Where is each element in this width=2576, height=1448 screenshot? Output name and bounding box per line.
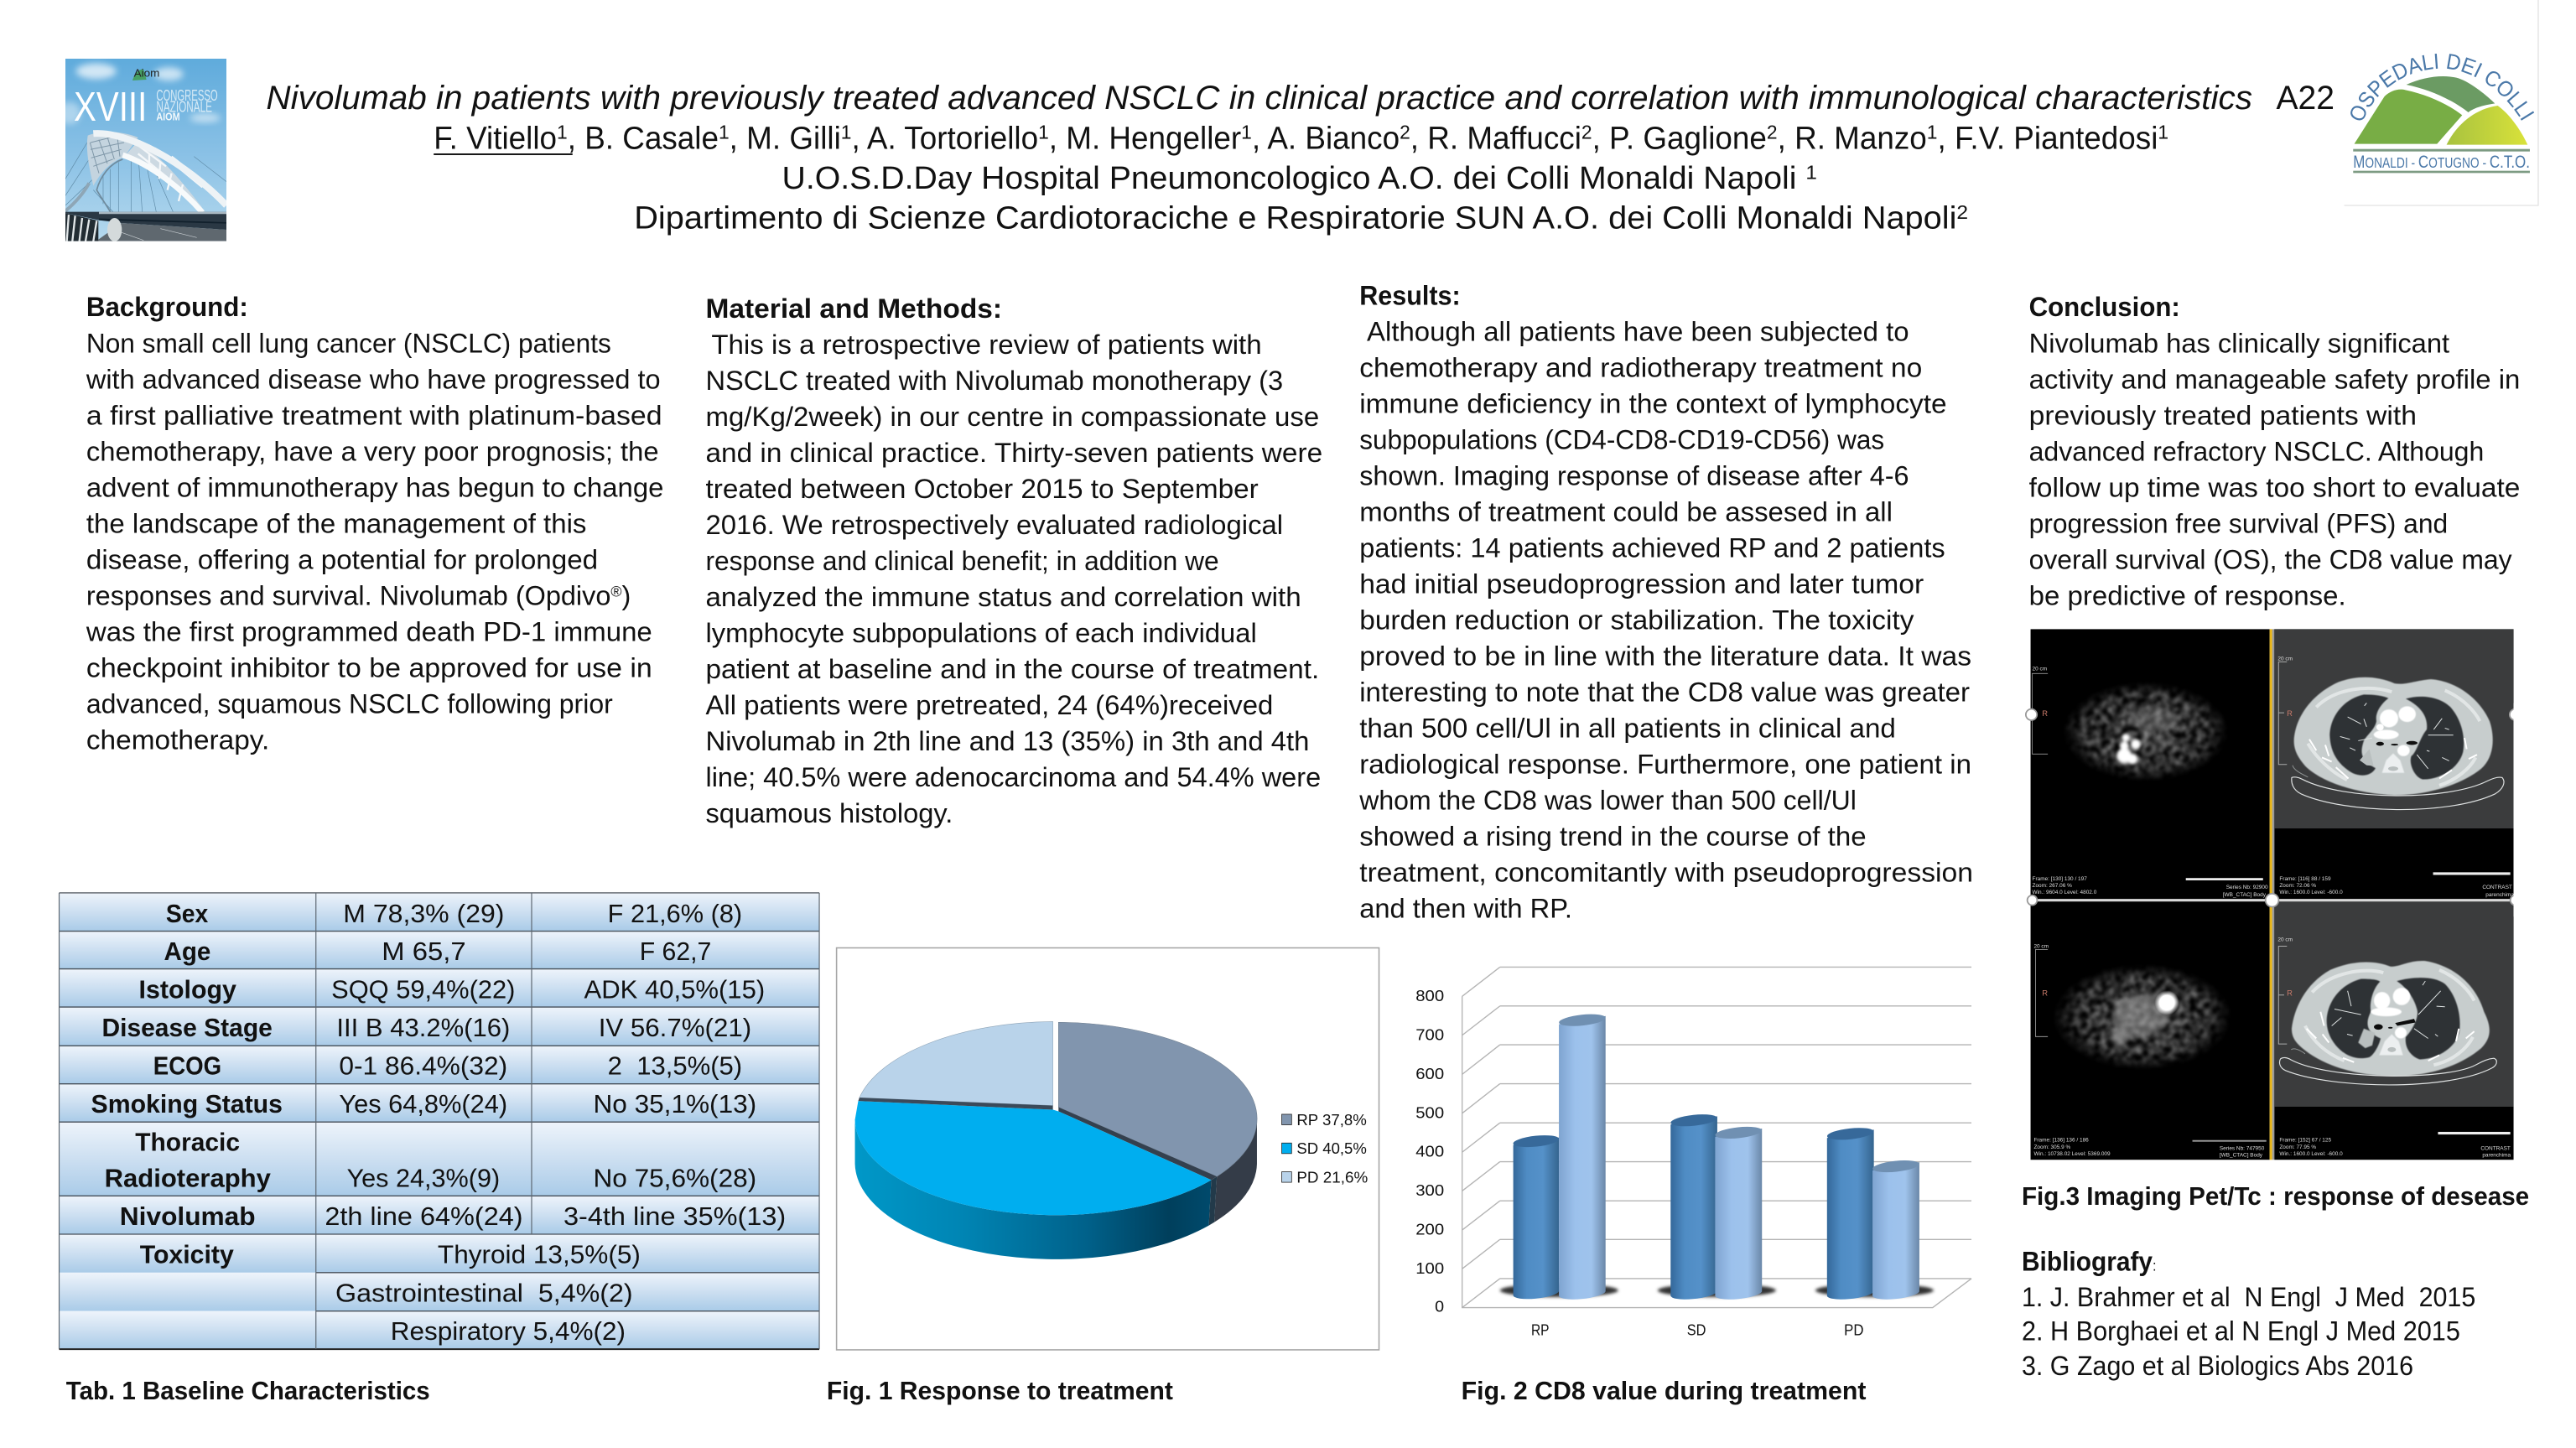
- cover title: AIOM: [156, 111, 180, 122]
- PET scan: after: [2033, 943, 2267, 1158]
- icon: congress cover with bridge: [59, 59, 226, 241]
- icon: hospital logo: OSPEDALI DEI COLLI: [2350, 54, 2534, 121]
- row labels: Thoracic: [135, 1127, 240, 1156]
- row labels: Smoking Status: [91, 1089, 283, 1118]
- y axis labels: 500: [1415, 1103, 1444, 1121]
- panel: conclusion: be predictive of response.: [2029, 580, 2346, 610]
- pie slice: SD 40,5%: [855, 1101, 1212, 1215]
- table: baseline characteristics: [60, 893, 819, 1349]
- panel: results: showed a rising trend in the course of the: [1359, 822, 1867, 852]
- row labels: Istology: [139, 974, 237, 1004]
- caption: table 1: Tab. 1 Baseline Characteristics: [66, 1376, 430, 1405]
- row labels: Disease Stage: [101, 1013, 273, 1042]
- authors: 2: [1581, 122, 1592, 143]
- column values: 2th line 64%(24): [325, 1201, 523, 1231]
- row labels: [91, 899, 283, 1269]
- authors: , R. Manzo: [1778, 121, 1927, 156]
- column values: III B 43.2%(16): [336, 1013, 510, 1042]
- panel: background: with advanced disease who have progressed to: [86, 364, 661, 394]
- pie slice: PD 21,6%: [860, 1021, 1053, 1106]
- y axis labels: 600: [1415, 1065, 1444, 1082]
- column values: 2 13,5%(5): [608, 1051, 742, 1080]
- heading: results: Results:: [1359, 280, 1461, 310]
- PET scan: before: [2033, 666, 2268, 898]
- panel: bibliography: [2022, 1246, 2475, 1381]
- CT scan: before: Frame: [116] 88 / 159: [2279, 876, 2331, 882]
- panel: conclusion: Nivolumab has clinically significant: [2029, 328, 2449, 358]
- authors: 1: [1038, 122, 1049, 143]
- panel: background: disease, offering a potential for prolonged: [86, 544, 598, 574]
- heading: material and methods: Material and Methods:: [705, 293, 1002, 324]
- column values: 3-4th line 35%(13): [564, 1201, 786, 1231]
- column values: Thyroid 13,5%(5): [438, 1240, 641, 1269]
- panel: material and methods: treated between October 2015 to September: [705, 474, 1259, 504]
- panel: bibliography: 1. J. Brahmer et al N Engl J Med 2015: [2022, 1282, 2475, 1312]
- panel: results: burden reduction or stabilization. The toxicity: [1359, 605, 1914, 636]
- PET scan: before: Zoom: 267.06 %: [2033, 883, 2072, 889]
- chart: CD8 3D bars: [1415, 967, 1971, 1338]
- panel: material and methods: and in clinical practice. Thirty-seven patients were: [705, 438, 1322, 468]
- y axis labels: 800: [1415, 987, 1444, 1004]
- PET scan: before: Frame: [130] 130 / 197: [2033, 876, 2087, 882]
- CT scan: after: [2274, 901, 2514, 1158]
- caption: figure 1: Fig. 1 Response to treatment: [827, 1376, 1173, 1405]
- panel: conclusion: follow up time was too short to evaluate: [2029, 472, 2520, 502]
- authors: [434, 121, 2168, 156]
- CT scan: after: Zoom: 77.95 %: [2279, 1144, 2316, 1150]
- column values: No 35,1%(13): [593, 1089, 756, 1118]
- grid lines and walls: [1462, 967, 1971, 1308]
- x axis labels: PD: [1844, 1321, 1863, 1338]
- panel: material and methods: patient at baseline and in the course of treatment.: [705, 654, 1319, 684]
- CT scan: after: CONTRAST: [2480, 1145, 2511, 1151]
- y axis labels: 700: [1415, 1025, 1444, 1043]
- x axis labels: [1531, 1321, 1863, 1338]
- cover title: NAZIONALE: [156, 98, 212, 115]
- column values: ADK 40,5%(15): [584, 974, 765, 1004]
- panel: conclusion: [2029, 292, 2520, 610]
- heading: conclusion: Conclusion:: [2029, 292, 2180, 322]
- CT scan: before: R: [2287, 708, 2293, 718]
- legend: SD 40,5%: [1296, 1139, 1367, 1157]
- column values: IV 56.7%(21): [599, 1013, 751, 1042]
- caption: figure 2: Fig. 2 CD8 value during treatment: [1462, 1376, 1866, 1405]
- cover title: CONGRESSO: [156, 87, 218, 104]
- row labels: Nivolumab: [120, 1201, 256, 1231]
- PET scan: before: [WB_CTAC] Body: [2223, 892, 2267, 898]
- PET scan: after: Win.: 10738.02 Level: 5369.009: [2033, 1151, 2111, 1157]
- CT scan: after: parenchima: [2482, 1152, 2511, 1158]
- panel: conclusion: overall survival (OS), the CD8 value may: [2029, 544, 2512, 574]
- PET scan: after: [WB_CTAC] Body: [2220, 1152, 2263, 1158]
- logo mark: Aiom: [134, 68, 159, 80]
- CT scan: before: [2274, 629, 2514, 898]
- panel: results: immune deficiency in the context of lymphocyte: [1359, 389, 1947, 419]
- panel: background: ): [622, 580, 631, 610]
- panel: material and methods: [705, 293, 1322, 828]
- panel: background: [86, 292, 664, 755]
- panel: material and methods: This is a retrospective review of patients with: [711, 330, 1262, 360]
- panel: results: whom the CD8 was lower than 500 cell/Ul: [1358, 786, 1857, 816]
- cover number: XVIII: [74, 85, 147, 130]
- column values: [325, 899, 786, 1346]
- x axis labels: SD: [1687, 1321, 1706, 1338]
- column values: F 21,6% (8): [608, 899, 742, 928]
- caption: figure 3: Fig.3 Imaging Pet/Tc : response of desease: [2022, 1181, 2529, 1211]
- panel: conclusion: previously treated patients with: [2029, 400, 2417, 430]
- PET scan: after: Series Nb: 747950: [2220, 1145, 2265, 1151]
- bars: PD: [1826, 1126, 1919, 1300]
- figure: PET/CT imaging: [2026, 629, 2523, 1160]
- column values: M 78,3% (29): [343, 899, 504, 928]
- PET scan: before: 20 cm: [2033, 666, 2047, 672]
- column values: No 75,6%(28): [593, 1164, 756, 1193]
- panel: results: [1358, 280, 1973, 924]
- row labels: Age: [164, 937, 210, 966]
- panel: material and methods: squamous histology.: [705, 798, 953, 828]
- panel: background: responses and survival. Nivolumab (Opdivo: [86, 580, 605, 610]
- authors: , F.V. Piantedosi: [1937, 121, 2158, 156]
- panel: results: and then with RP.: [1359, 894, 1572, 924]
- CT scan: before: Zoom: 72.06 %: [2279, 883, 2316, 889]
- authors: , P. Gaglione: [1592, 121, 1767, 156]
- y axis labels: [1415, 987, 1444, 1315]
- CT scan: after: 20 cm: [2277, 937, 2293, 943]
- heading: background: Background:: [86, 292, 248, 322]
- column values: Yes 64,8%(24): [339, 1089, 507, 1118]
- authors: , M. Hengeller: [1049, 121, 1242, 156]
- column values: SQQ 59,4%(22): [331, 974, 515, 1004]
- panel: material and methods: mg/Kg/2week) in our centre in compassionate use: [705, 402, 1319, 432]
- affiliation 2: Dipartimento di Scienze Cardiotoraciche e Respiratorie SUN A.O. dei Colli Monaldi Napoli: [634, 201, 1898, 236]
- panel: material and methods: analyzed the immune status and correlation with: [705, 582, 1301, 612]
- y axis labels: 0: [1435, 1297, 1444, 1315]
- panel: background: ®: [610, 584, 622, 600]
- CT scan: after: R: [2287, 988, 2293, 997]
- column values: Yes 24,3%(9): [347, 1164, 500, 1193]
- PET scan: before: Win.: 9604.0 Level: 4802.0: [2033, 890, 2097, 895]
- authors: 2: [1767, 122, 1778, 143]
- pie slice side: SD: [855, 1120, 1212, 1259]
- panel: background: checkpoint inhibitor to be approved for use in: [86, 652, 652, 682]
- authors: 1: [1241, 122, 1252, 143]
- authors: 1: [719, 122, 730, 143]
- panel: results: than 500 cell/Ul in all patients in clinical and: [1359, 714, 1896, 744]
- column values: 0-1 86.4%(32): [339, 1051, 507, 1080]
- authors: , A. Tortoriello: [851, 121, 1038, 156]
- panel: results: had initial pseudoprogression and later tumor: [1359, 569, 1924, 599]
- PET scan: before: Series Nb: 92900: [2226, 885, 2268, 890]
- panel: results: proved to be in line with the literature data. It was: [1359, 641, 1971, 672]
- affiliation 2: 2: [1956, 201, 1968, 223]
- chart: response pie: [837, 947, 1379, 1350]
- column values: Gastrointestinal 5,4%(2): [335, 1279, 633, 1308]
- panel: results: treatment, concomitantly with pseudoprogression: [1359, 858, 1973, 888]
- PET scan: after: Zoom: 305.9 %: [2033, 1144, 2070, 1150]
- legend: [1282, 1111, 1368, 1186]
- row labels: Toxicity: [140, 1240, 235, 1269]
- CT scan: before: CONTRAST: [2482, 885, 2512, 890]
- panel: background: advanced, squamous NSCLC following prior: [86, 688, 613, 719]
- authors: 1: [2158, 122, 2168, 143]
- column values: Respiratory 5,4%(2): [391, 1316, 626, 1346]
- panel: background: was the first programmed death PD-1 immune: [86, 616, 652, 646]
- panel: conclusion: advanced refractory NSCLC. Although: [2029, 436, 2484, 466]
- panel: background: a first palliative treatment with platinum-based: [86, 400, 662, 430]
- authors: , B. Casale: [568, 121, 719, 156]
- PET scan: after: 20 cm: [2033, 943, 2049, 949]
- row labels: Sex: [166, 899, 208, 928]
- pie slice side: RP: [1214, 1118, 1257, 1222]
- column values: F 62,7: [640, 937, 711, 966]
- floor shadows: [1500, 1284, 1934, 1297]
- authors: , M. Gilli: [730, 121, 841, 156]
- panel: results: months of treatment could be assesed in all: [1359, 497, 1893, 527]
- panel: background: chemotherapy, have a very poor prognosis; the: [86, 436, 659, 466]
- panel: material and methods: Nivolumab in 2th line and 13 (35%) in 3th and 4th: [705, 726, 1309, 756]
- PET scan: before: R: [2042, 708, 2048, 718]
- panel: results: chemotherapy and radiotherapy treatment no: [1359, 353, 1922, 383]
- authors: 1: [557, 122, 568, 143]
- panel: background: Non small cell lung cancer (NSCLC) patients: [86, 328, 611, 358]
- CT scan: before: 20 cm: [2277, 657, 2293, 662]
- panel: background: advent of immunotherapy has begun to change: [86, 472, 664, 502]
- y axis labels: 300: [1415, 1181, 1444, 1199]
- authors: 1: [841, 122, 851, 143]
- abstract code: A22: [2276, 79, 2334, 117]
- panel: material and methods: NSCLC treated with Nivolumab monotherapy (3: [705, 366, 1283, 396]
- bars: SD: [1670, 1113, 1763, 1300]
- title: Nivolumab in patients with previously treated advanced NSCLC in clinical practice and correlation with immunological characteristics: [266, 79, 2252, 117]
- icon: hospital logo: MONALDI - COTUGNO - C.T.O.: [2353, 152, 2530, 172]
- CT scan: after: Frame: [152] 67 / 125: [2279, 1138, 2331, 1144]
- y axis labels: 200: [1415, 1221, 1444, 1238]
- viewer separators and handles: [2026, 709, 2521, 907]
- CT scan: before: Win.: 1600.0 Level: -600.0: [2279, 890, 2343, 895]
- heading: bibliography: Bibliografy:: [2022, 1246, 2157, 1276]
- CT scan: after: Win.: 1600.0 Level: -600.0: [2279, 1151, 2343, 1157]
- panel: conclusion: activity and manageable safety profile in: [2029, 364, 2520, 394]
- pie slice: RP 37,8%: [1058, 1022, 1257, 1176]
- panel: results: radiological response. Furthermore, one patient in: [1359, 750, 1971, 780]
- bars: RP: [1513, 1012, 1606, 1300]
- authors: , R. Maffucci: [1410, 121, 1581, 156]
- x axis labels: RP: [1531, 1321, 1550, 1338]
- row labels: ECOG: [153, 1051, 221, 1080]
- legend: PD 21,6%: [1296, 1168, 1368, 1186]
- authors: 2: [1400, 122, 1410, 143]
- panel: results: subpopulations (CD4-CD8-CD19-CD56) was: [1359, 425, 1884, 455]
- panel: material and methods: line; 40.5% were adenocarcinoma and 54.4% were: [705, 762, 1321, 792]
- y axis labels: 400: [1415, 1143, 1444, 1160]
- PET scan: after: R: [2042, 988, 2048, 997]
- CT scan: before: parenchima: [2485, 892, 2514, 898]
- icon: hospital logo: [2345, 0, 2539, 206]
- PET scan: after: Frame: [136] 136 / 186: [2033, 1138, 2089, 1144]
- panel: results: Although all patients have been subjected to: [1367, 317, 1909, 347]
- panel: material and methods: response and clinical benefit; in addition we: [705, 546, 1219, 576]
- panel: background: the landscape of the management of this: [86, 508, 586, 538]
- legend: RP 37,8%: [1296, 1111, 1367, 1129]
- affiliation 1: 1: [1805, 161, 1817, 183]
- row labels: Radioteraphy: [105, 1164, 272, 1193]
- panel: bibliography: 3. G Zago et al Biologics Abs 2016: [2022, 1351, 2413, 1381]
- panel: material and methods: 2016. We retrospectively evaluated radiological: [705, 510, 1283, 540]
- panel: conclusion: progression free survival (PFS) and: [2029, 508, 2448, 538]
- affiliation 1: U.O.S.D.Day Hospital Pneumoncologico A.O. dei Colli Monaldi Napoli: [782, 161, 1765, 196]
- panel: results: shown. Imaging response of disease after 4-6: [1359, 461, 1909, 491]
- panel: results: patients: 14 patients achieved RP and 2 patients: [1359, 533, 1945, 563]
- y axis labels: 100: [1415, 1259, 1444, 1277]
- bridge: [65, 132, 226, 214]
- panel: bibliography: 2. H Borghaei et al N Engl J Med 2015: [2022, 1316, 2460, 1347]
- cover title: [156, 90, 218, 121]
- authors: F. Vitiello: [434, 121, 561, 156]
- authors: , A. Bianco: [1252, 121, 1400, 156]
- authors: 1: [1927, 122, 1937, 143]
- column values: M 65,7: [382, 937, 466, 966]
- panel: background: chemotherapy.: [86, 724, 269, 755]
- panel: material and methods: All patients were pretreated, 24 (64%)received: [705, 690, 1273, 720]
- panel: results: interesting to note that the CD8 value was greater: [1359, 677, 1970, 708]
- panel: material and methods: lymphocyte subpopulations of each individual: [705, 618, 1257, 648]
